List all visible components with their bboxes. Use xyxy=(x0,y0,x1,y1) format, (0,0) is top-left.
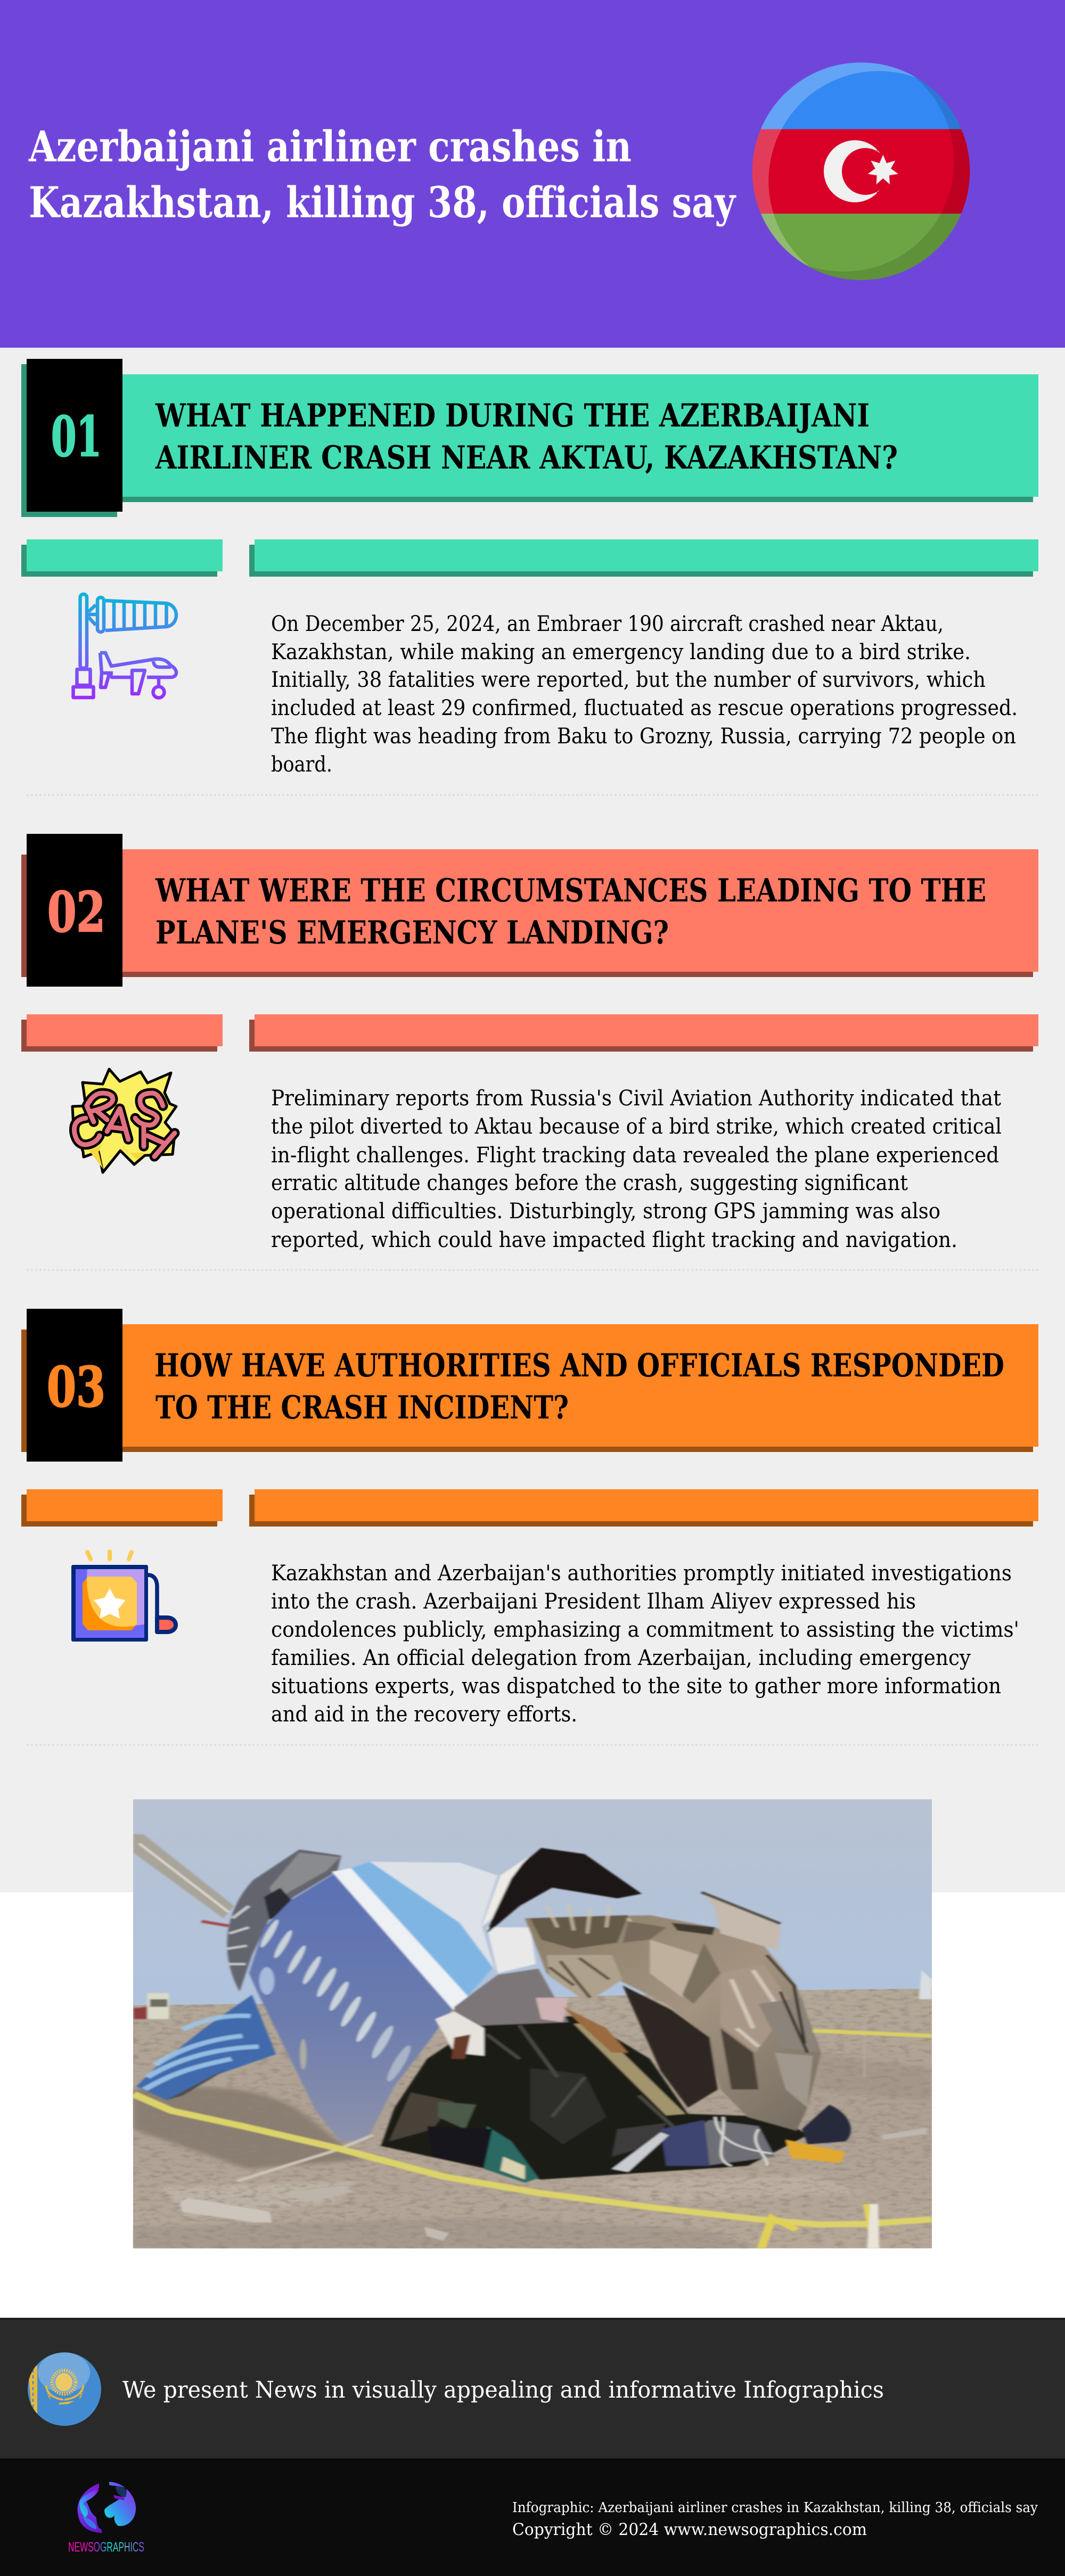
number 03: 03 xyxy=(47,1355,105,1420)
text block 2 xyxy=(271,1086,1002,1252)
text block 3: condolences publicly, emphasizing a commitment to assisting the victims' xyxy=(271,1618,1019,1642)
text block 1: Kazakhstan, while making an emergency landing due to a bird strike. xyxy=(271,640,971,664)
text block 3 xyxy=(271,1561,1019,1727)
heading 2 xyxy=(155,872,986,951)
title: Kazakhstan, killing 38, officials say xyxy=(29,177,736,227)
icon: Kazakhstan flag xyxy=(28,2352,101,2426)
number 02: 02 xyxy=(47,880,105,945)
logo wordmark: NEWSOGRAPHICS xyxy=(68,2540,144,2555)
text block 1: Initially, 38 fatalities were reported, but the number of survivors, which xyxy=(271,668,986,692)
title: Azerbaijani airliner crashes in xyxy=(28,121,632,171)
sub-bars 3 xyxy=(21,1489,1038,1527)
icon: official badge xyxy=(71,1552,176,1642)
heading 3: TO THE CRASH INCIDENT? xyxy=(155,1389,569,1426)
heading band 1 xyxy=(21,359,1038,517)
heading band 2 xyxy=(21,834,1038,987)
heading 1: WHAT HAPPENED DURING THE AZERBAIJANI xyxy=(155,397,870,434)
text block 1: board. xyxy=(271,752,332,777)
text block 1: included at least 29 confirmed, fluctuated as rescue operations progressed. xyxy=(271,696,1018,720)
sub-bars 2 xyxy=(21,1014,1038,1052)
panel: header xyxy=(0,0,1065,348)
panel: section 1 xyxy=(21,359,1038,777)
text block 3: into the crash. Azerbaijani President Ilham Aliyev expressed his xyxy=(271,1589,916,1614)
text block 2: operational difficulties. Disturbingly, strong GPS jamming was also xyxy=(271,1199,940,1224)
heading 2: PLANE'S EMERGENCY LANDING? xyxy=(155,914,669,951)
text block 2: reported, which could have impacted flight tracking and navigation. xyxy=(271,1228,957,1252)
panel: credits footer xyxy=(0,2458,1065,2576)
heading band 3 xyxy=(21,1309,1038,1462)
icon: windsock and plane xyxy=(73,594,176,698)
panel: tagline footer xyxy=(0,2318,1065,2458)
text block 2: the pilot diverted to Aktau because of a bird strike, which created critical xyxy=(271,1114,1002,1139)
number 01: 01 xyxy=(51,405,102,469)
text block 3: situations experts, was dispatched to the site to gather more information xyxy=(271,1674,1001,1699)
photo: aircraft wreckage xyxy=(133,1799,932,2249)
sub-bars 1 xyxy=(21,539,1038,577)
credit line: Infographic: Azerbaijani airliner crashes in Kazakhstan, killing 38, officials say xyxy=(512,2499,1038,2516)
title xyxy=(28,121,736,227)
text block 1: The flight was heading from Baku to Grozny, Russia, carrying 72 people on xyxy=(271,724,1016,749)
text block 2: in-flight challenges. Flight tracking data revealed the plane experienced xyxy=(271,1143,999,1168)
icon: crash burst xyxy=(72,1069,176,1172)
text block 3: families. An official delegation from Azerbaijan, including emergency xyxy=(271,1646,971,1670)
panel: section 2 xyxy=(21,834,1038,1252)
icon: Azerbaijan flag xyxy=(752,62,970,280)
heading 1: AIRLINER CRASH NEAR AKTAU, KAZAKHSTAN? xyxy=(155,439,898,477)
heading 1 xyxy=(155,397,898,477)
tagline: We present News in visually appealing and informative Infographics xyxy=(122,2377,884,2403)
logo: Newsographics xyxy=(68,2482,144,2555)
text block 2: erratic altitude changes before the crash, suggesting significant xyxy=(271,1171,908,1195)
copyright line: Copyright © 2024 www.newsographics.com xyxy=(512,2520,867,2539)
panel: section 3 xyxy=(21,1309,1038,1727)
text block 3: Kazakhstan and Azerbaijan's authorities promptly initiated investigations xyxy=(271,1561,1012,1586)
text block 1 xyxy=(271,612,1018,777)
text block 1: On December 25, 2024, an Embraer 190 aircraft crashed near Aktau, xyxy=(271,612,944,636)
text block 3: and aid in the recovery efforts. xyxy=(271,1702,577,1727)
heading 3 xyxy=(154,1347,1004,1426)
text block 2: Preliminary reports from Russia's Civil Aviation Authority indicated that xyxy=(271,1086,1001,1111)
